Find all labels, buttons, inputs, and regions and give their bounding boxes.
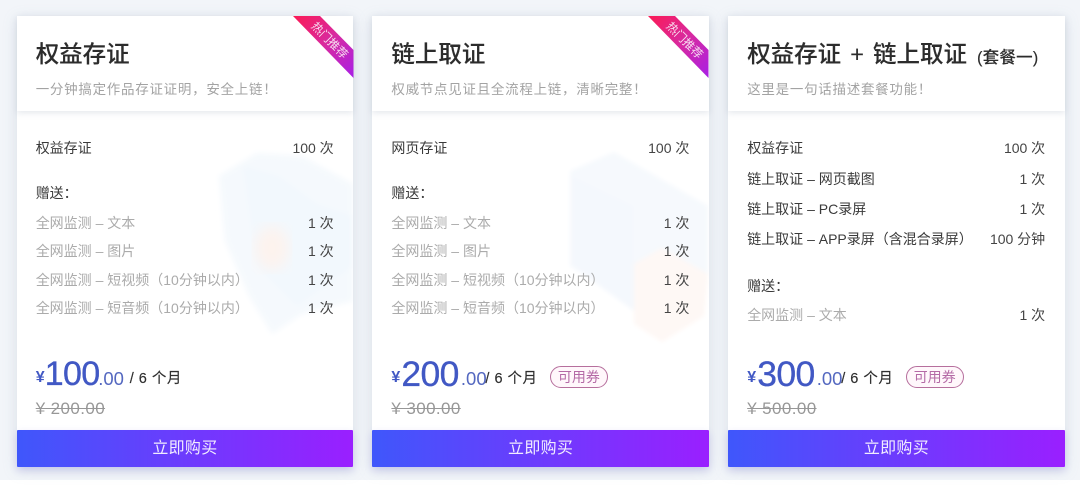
panel: combo plan bbox=[728, 16, 1065, 467]
row: short video monitoring: 全网监测 – 短视频（10分钟以内） bbox=[36, 272, 249, 288]
hot recommendation ribbon bbox=[293, 16, 354, 78]
buy button bbox=[17, 430, 353, 467]
row: text monitoring bbox=[391, 215, 689, 231]
panel: on-chain evidence plan bbox=[372, 16, 709, 467]
card header bbox=[17, 16, 353, 111]
background illustration: shield bbox=[222, 156, 352, 329]
row: short audio monitoring: 全网监测 – 短音频（10分钟以内） bbox=[36, 300, 249, 316]
row: short video monitoring: 全网监测 – 短视频（10分钟以内） bbox=[391, 272, 605, 288]
row: image monitoring: 1 次 bbox=[308, 243, 334, 259]
price: 300 bbox=[757, 354, 815, 394]
hot recommendation ribbon bbox=[648, 16, 708, 78]
price: / 6 个月 bbox=[841, 371, 893, 387]
row: short audio monitoring: 全网监测 – 短音频（10分钟以内） bbox=[391, 300, 605, 316]
row: 网页存证 bbox=[391, 140, 689, 156]
row: text monitoring: 全网监测 – 文本 bbox=[747, 307, 847, 323]
background illustration: building block bbox=[572, 156, 706, 339]
plan subtitle: 这里是一句话描述套餐功能！ bbox=[747, 82, 932, 97]
price: .00 bbox=[817, 368, 842, 389]
row: text monitoring bbox=[36, 215, 334, 231]
row: 权益存证 bbox=[747, 140, 1045, 156]
row: image monitoring bbox=[36, 243, 334, 259]
row: 权益存证: 权益存证 bbox=[747, 140, 803, 156]
row: 网页存证: 网页存证 bbox=[391, 140, 447, 156]
row: webpage screenshot: 链上取证 – 网页截图 bbox=[747, 171, 875, 187]
row: PC recording: 链上取证 – PC录屏 bbox=[747, 201, 866, 217]
buy button: 立即购买 bbox=[152, 440, 218, 457]
row: short video monitoring: 1 次 bbox=[664, 272, 689, 288]
row: image monitoring: 全网监测 – 图片 bbox=[391, 243, 491, 259]
row: PC recording bbox=[747, 201, 1045, 217]
row: 权益存证: 100 次 bbox=[292, 140, 334, 156]
row: short audio monitoring: 1 次 bbox=[308, 300, 334, 316]
price: / 6 个月 bbox=[130, 371, 182, 387]
row: APP recording: 链上取证 – APP录屏（含混合录屏） bbox=[747, 231, 973, 247]
row: 权益存证 bbox=[36, 140, 334, 156]
row: text monitoring: 1 次 bbox=[664, 215, 689, 231]
row: text monitoring: 全网监测 – 文本 bbox=[391, 215, 491, 231]
buy button bbox=[372, 430, 709, 467]
plan subtitle: 一分钟搞定作品存证证明，安全上链！ bbox=[36, 82, 277, 97]
price: ¥ bbox=[391, 369, 400, 386]
plan title: 权益存证 bbox=[36, 41, 130, 67]
plan subtitle: 权威节点见证且全流程上链，清晰完整！ bbox=[391, 82, 647, 97]
row: webpage screenshot: 1 次 bbox=[1020, 171, 1045, 187]
row: gift label: 赠送： bbox=[747, 278, 789, 294]
buy button bbox=[728, 430, 1065, 467]
row: image monitoring: 全网监测 – 图片 bbox=[36, 243, 135, 259]
row: text monitoring: 全网监测 – 文本 bbox=[36, 215, 135, 231]
row: 权益存证: 100 次 bbox=[1004, 140, 1045, 156]
card header bbox=[372, 16, 709, 111]
plan title: 权益存证 + 链上取证 (套餐一) bbox=[747, 41, 1038, 67]
price: / 6 个月 bbox=[485, 371, 538, 387]
row: gift label: 赠送： bbox=[391, 185, 433, 201]
row: text monitoring bbox=[747, 307, 1045, 323]
hot recommendation ribbon: 热门推荐 bbox=[308, 19, 351, 62]
card header bbox=[728, 16, 1065, 111]
price: .00 bbox=[98, 368, 124, 389]
original price: ¥ 300.00 bbox=[391, 399, 461, 418]
price bbox=[36, 355, 182, 393]
coupon tag: 可用券 bbox=[914, 369, 956, 385]
row: short audio monitoring: 1 次 bbox=[664, 300, 689, 316]
row: short video monitoring: 1 次 bbox=[308, 272, 334, 288]
price: 200 bbox=[401, 354, 459, 394]
row: APP recording: 100 分钟 bbox=[990, 231, 1045, 247]
hot recommendation ribbon: 热门推荐 bbox=[664, 19, 706, 62]
original price: ¥ 500.00 bbox=[747, 399, 817, 418]
row: image monitoring: 1 次 bbox=[664, 243, 689, 259]
price bbox=[747, 354, 893, 394]
coupon tag: 可用券 bbox=[558, 369, 600, 385]
row: 网页存证: 100 次 bbox=[648, 140, 689, 156]
row: text monitoring: 1 次 bbox=[1020, 307, 1045, 323]
buy button: 立即购买 bbox=[508, 440, 573, 457]
price: ¥ bbox=[747, 369, 756, 386]
panel: rights certificate plan bbox=[17, 16, 353, 467]
price: 100 bbox=[45, 355, 100, 393]
price: .00 bbox=[461, 368, 487, 389]
row: 权益存证: 权益存证 bbox=[36, 140, 92, 156]
price bbox=[391, 354, 538, 394]
row: text monitoring: 1 次 bbox=[308, 215, 334, 231]
row: image monitoring bbox=[391, 243, 689, 259]
coupon tag bbox=[550, 366, 608, 388]
price: ¥ bbox=[36, 369, 45, 386]
plan title: 链上取证 bbox=[391, 41, 485, 67]
original price: ¥ 200.00 bbox=[36, 399, 105, 418]
buy button: 立即购买 bbox=[864, 440, 929, 457]
coupon tag bbox=[906, 366, 964, 388]
row: PC recording: 1 次 bbox=[1020, 201, 1045, 217]
row: gift label: 赠送： bbox=[36, 185, 78, 201]
row: webpage screenshot bbox=[747, 171, 1045, 187]
